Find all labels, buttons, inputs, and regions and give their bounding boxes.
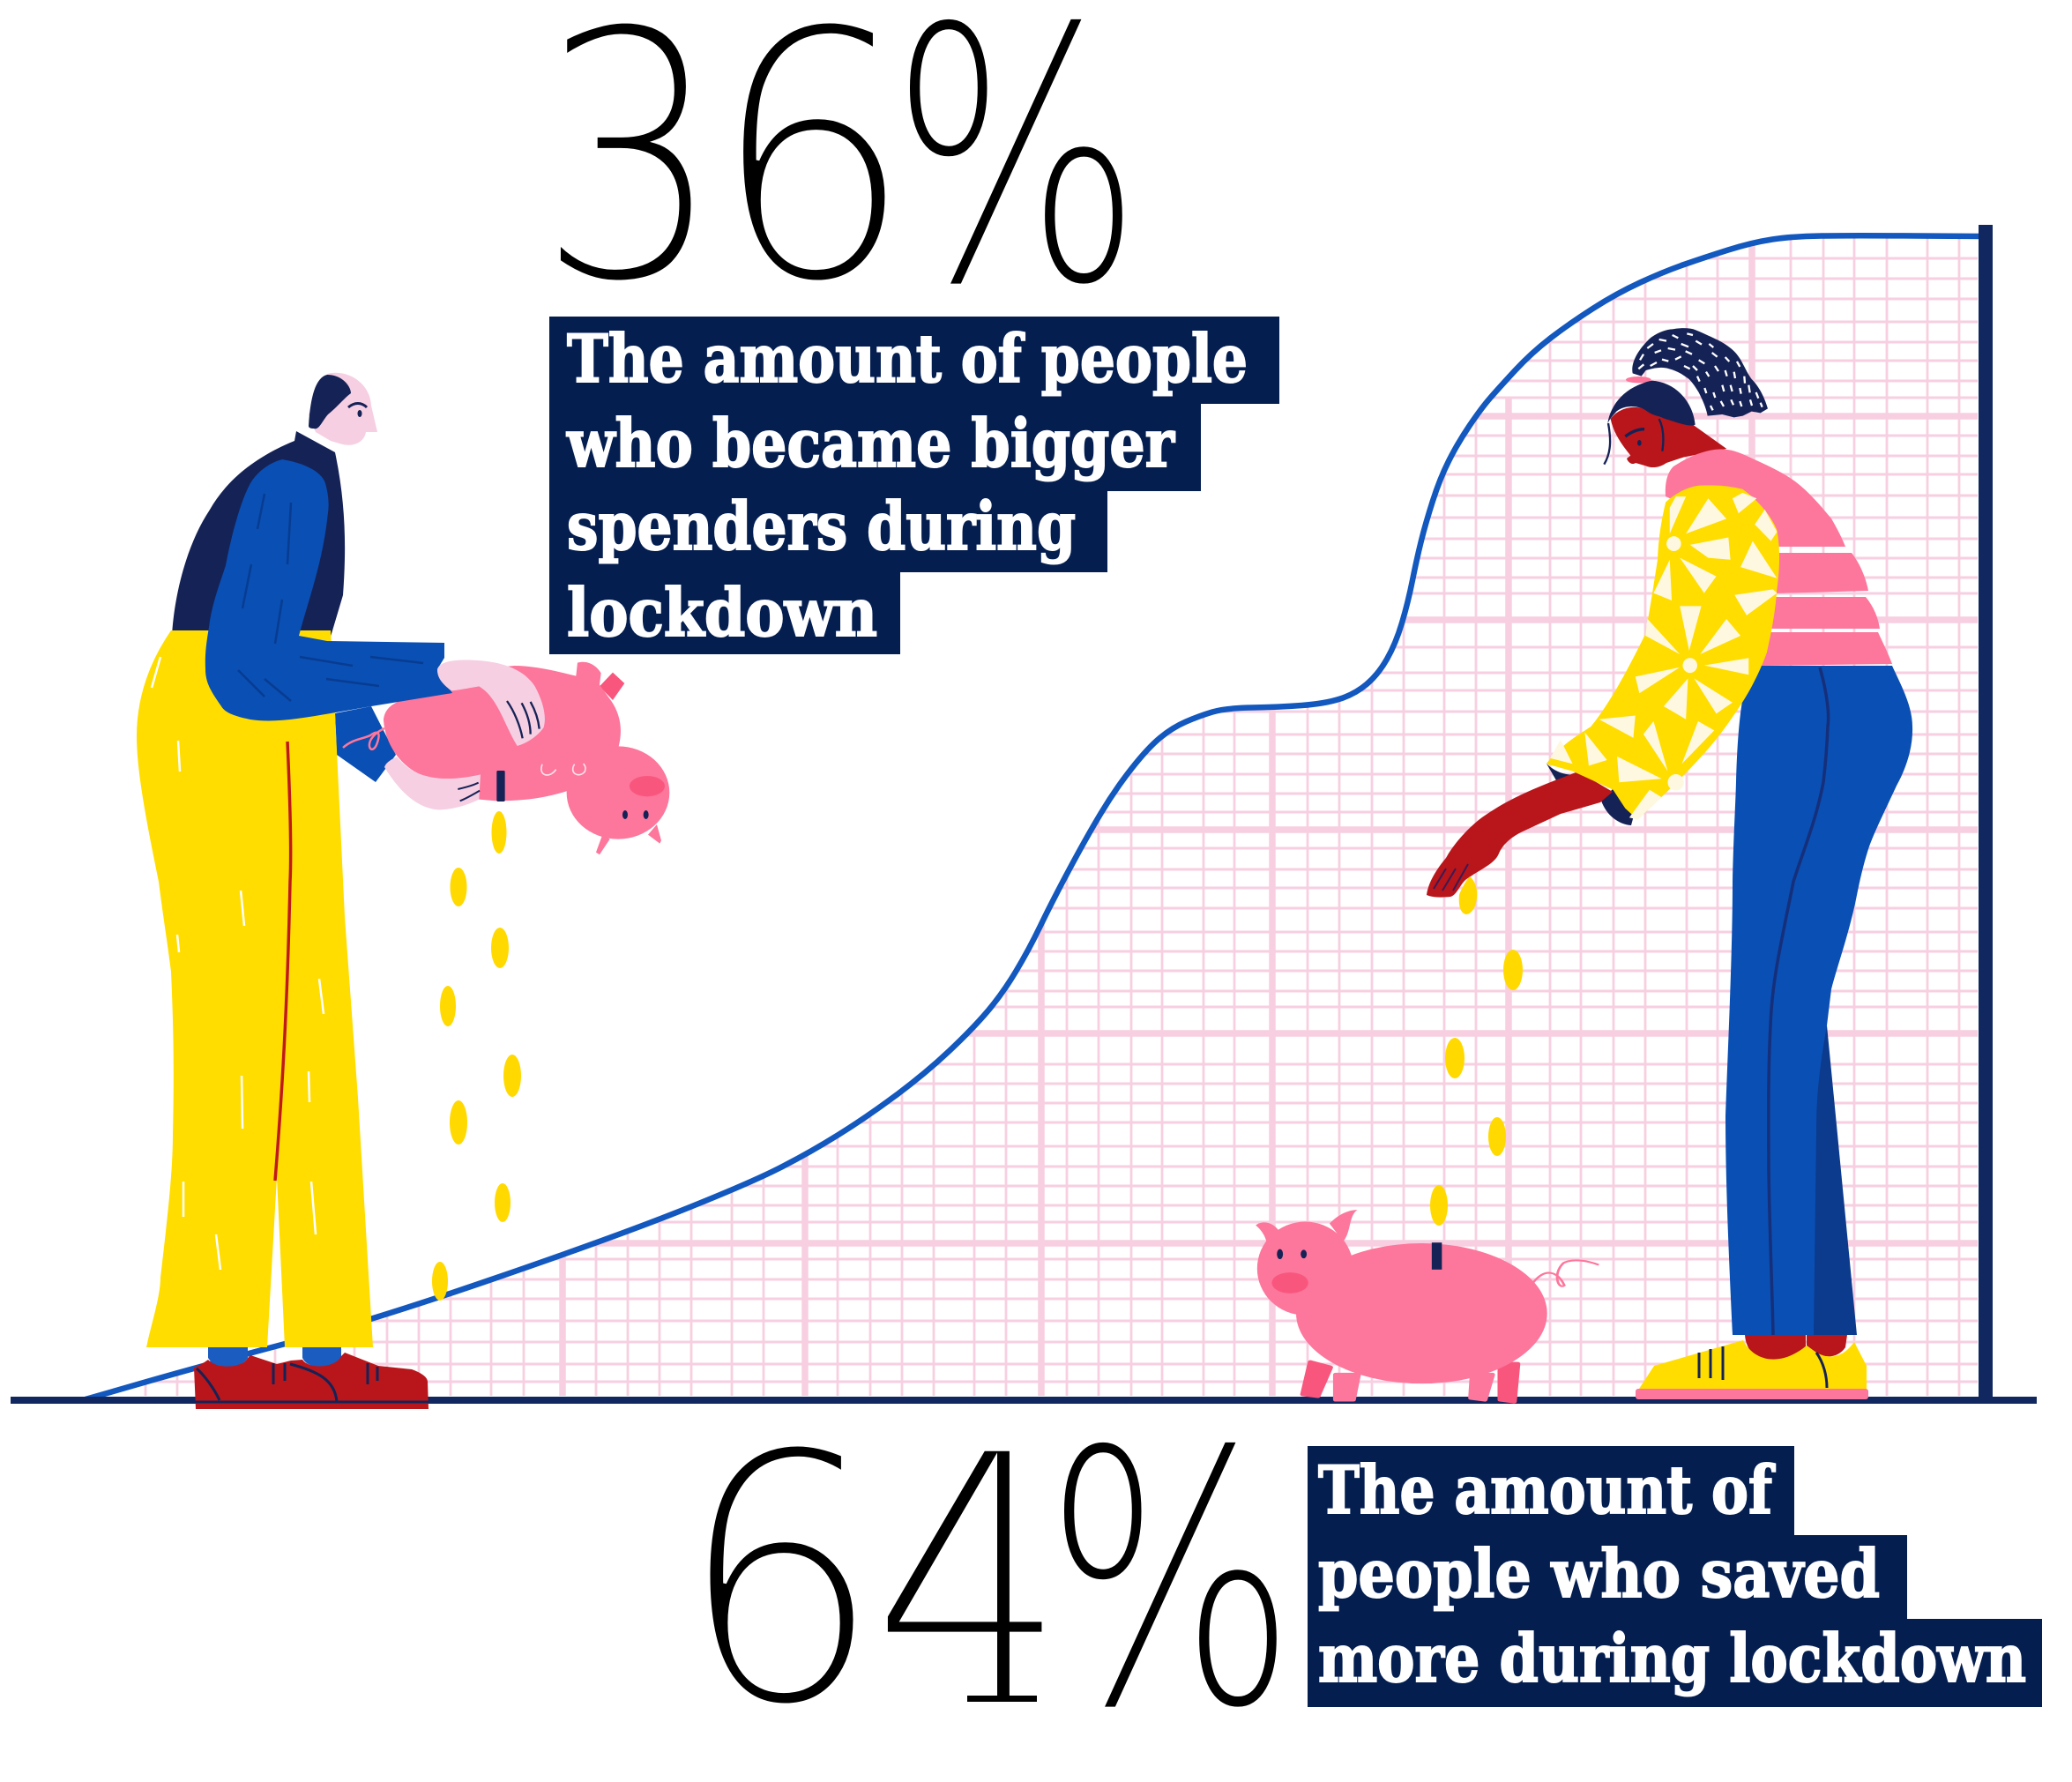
man: yellow trousers (137, 630, 373, 1347)
man: upper hand finger lines (507, 701, 540, 738)
pig: head (567, 746, 669, 839)
chart: right axis (1979, 225, 1993, 1402)
sleeve: cream petal pattern (1550, 493, 1777, 819)
woman: curly ponytail (1632, 328, 1768, 417)
caption: bigger spenders: spenders during (567, 488, 1076, 565)
woman: hair (1607, 381, 1696, 426)
caption: savers: The amount of (1318, 1451, 1776, 1529)
stat: 64% (677, 1376, 1298, 1782)
man: far sleeve (335, 706, 396, 782)
man: shoe laces (195, 1363, 429, 1402)
man: head (309, 373, 377, 445)
figure: woman saving money (1427, 328, 1912, 1399)
man: tie string on cuff (343, 728, 384, 749)
falling coins: saver (1430, 950, 1523, 1226)
pig: ears (1256, 1210, 1357, 1245)
falling coins: spender (432, 811, 521, 1301)
man: hands (384, 660, 545, 809)
man: trouser highlights (152, 657, 324, 1270)
pig: eyes (622, 810, 649, 819)
upturned piggy bank (384, 662, 669, 854)
woman: rear trouser leg (1807, 1025, 1857, 1335)
man: trouser crease (275, 742, 291, 1181)
coin under the woman's hand (1459, 876, 1477, 914)
woman: hair strands (1604, 419, 1663, 465)
caption: savers (1308, 1446, 2042, 1707)
pig: snout (1271, 1272, 1308, 1294)
woman: blue trousers (1725, 666, 1912, 1335)
pig: far legs (1302, 1362, 1517, 1402)
sleeve: yellow fabric (1547, 485, 1779, 819)
pig: body (1296, 1243, 1547, 1383)
man: hair (309, 375, 351, 429)
woman: sleeve lining (1547, 764, 1634, 825)
man: blue sweater and arm (205, 459, 452, 720)
caption: savers: people who saved (1318, 1535, 1880, 1613)
woman: red socks (1745, 1335, 1847, 1363)
caption: bigger spenders (549, 317, 1279, 654)
pig: near legs (1336, 1375, 1493, 1400)
pig: snout (630, 776, 665, 796)
man: upper hand (437, 660, 545, 746)
woman: hair band (1626, 377, 1651, 383)
man: blue socks (208, 1347, 341, 1367)
woman: neck and face (1611, 407, 1726, 467)
pig: ears (596, 824, 661, 854)
chart: graph paper area under the curve (79, 229, 1978, 1402)
woman: pink soles (1636, 1389, 1868, 1399)
stat: 36% (537, 0, 1144, 365)
chart: blue savings curve (86, 235, 1982, 1399)
woman: pink striped jumper (1666, 449, 1892, 666)
pig: dark foot (600, 673, 624, 700)
upright piggy bank (1256, 1210, 1599, 1402)
man: navy vest (172, 431, 345, 637)
chart: ground axis (11, 1397, 2037, 1404)
man: lower hand finger lines (458, 783, 480, 801)
woman: patterned yellow sleeve (1547, 485, 1779, 819)
pig: body (384, 662, 621, 801)
caption: bigger spenders: who became bigger (566, 405, 1175, 482)
woman: arm and hand (1427, 772, 1613, 898)
man: lower hand (384, 757, 481, 809)
man: eyebrow and eye (348, 404, 367, 417)
woman: trouser seam (1769, 667, 1829, 1335)
woman: ponytail curls (1638, 333, 1763, 410)
man: sweater texture (238, 494, 423, 701)
figure: man emptying his piggy bank (137, 373, 669, 1409)
pig: head (1257, 1222, 1353, 1316)
woman: finger lines (1434, 864, 1468, 891)
stat: 64%: 6 (677, 1382, 883, 1782)
pig: nipples (541, 764, 585, 775)
caption: bigger spenders: The amount of people (567, 320, 1248, 398)
woman: brow and eye (1625, 429, 1644, 446)
man: red shoes (194, 1353, 429, 1409)
woman: head and ponytail (1604, 328, 1768, 467)
stat: 64%: % (1043, 1376, 1298, 1782)
woman: yellow shoes (1639, 1340, 1867, 1389)
pig: coin slot (1432, 1242, 1442, 1270)
stat: 64%: 4 (871, 1382, 1068, 1782)
pig: eyes (1277, 1249, 1307, 1259)
pig: curly tail (1533, 1260, 1599, 1286)
caption: bigger spenders: lockdown (567, 574, 877, 652)
pig: coin slot (496, 771, 505, 802)
woman: shoe laces (1699, 1346, 1827, 1388)
